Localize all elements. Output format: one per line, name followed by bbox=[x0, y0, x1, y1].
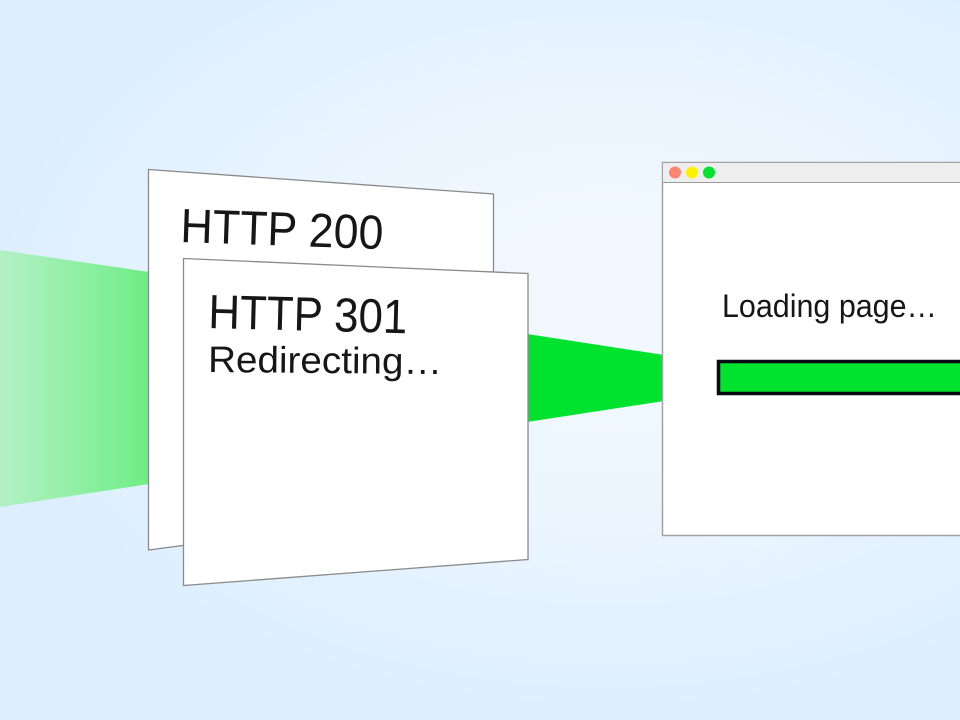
progress bar bbox=[718, 362, 960, 394]
text: Loading page…: Loading page… bbox=[722, 288, 937, 324]
panel: browser window bbox=[662, 162, 960, 536]
panel: HTTP 200 page bbox=[148, 170, 494, 550]
heading: HTTP 301: HTTP 301 bbox=[208, 286, 408, 344]
text: Redirecting…: Redirecting… bbox=[208, 339, 442, 382]
heading: HTTP 200: HTTP 200 bbox=[180, 200, 384, 260]
connecting light beam bbox=[527, 334, 664, 422]
title bar divider bbox=[663, 182, 960, 183]
panel: HTTP 301 page bbox=[184, 258, 528, 586]
icon: yellow window button bbox=[686, 166, 698, 178]
icon: red window button bbox=[669, 166, 681, 178]
icon: green window button bbox=[703, 166, 715, 178]
incoming light beam bbox=[0, 250, 149, 507]
browser title bar bbox=[663, 163, 960, 182]
